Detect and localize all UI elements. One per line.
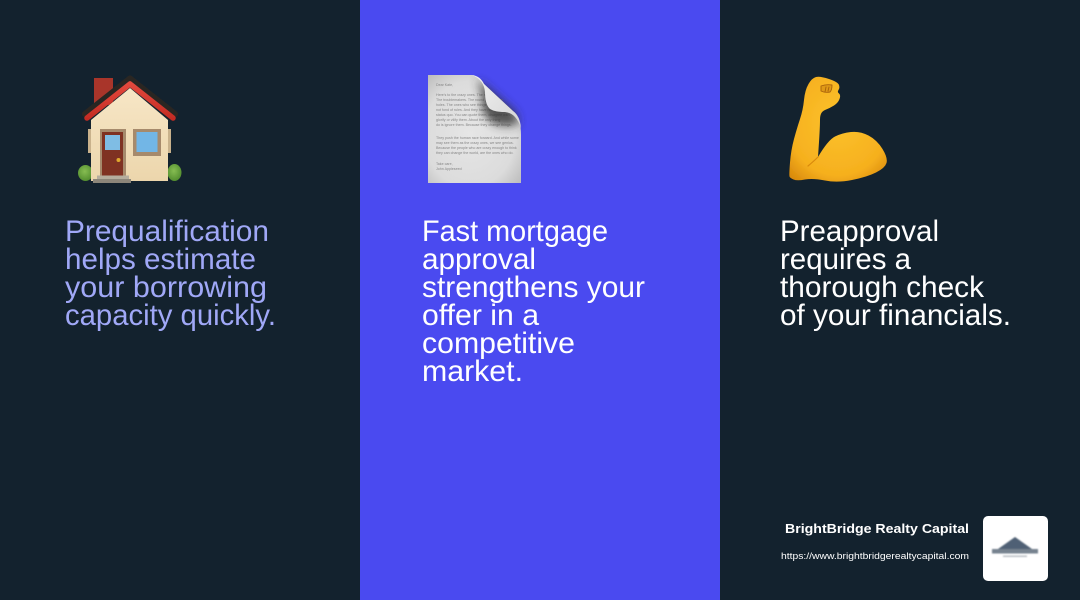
- page curl flap: [472, 75, 521, 128]
- text: prequalification: your borrowing: [65, 271, 267, 304]
- icon: house: [78, 78, 182, 183]
- icon: document: John Appleseed: [436, 167, 462, 171]
- icon: document: not fond of rules. And they have no respect: [436, 108, 504, 112]
- panel: preapproval: [720, 0, 1080, 600]
- logo: [983, 516, 1048, 581]
- text: preapproval: of your financials.: [780, 299, 1011, 332]
- text: prequalification: helps estimate: [65, 243, 256, 276]
- text: preapproval: Preapproval: [780, 215, 939, 248]
- icon: document: They push the human race forward. And while some: [436, 136, 519, 140]
- shadow under the curl: [476, 80, 519, 126]
- text: fast mortgage approval: market.: [422, 355, 523, 388]
- text: prequalification: Prequalification: [65, 215, 269, 248]
- icon: document: Dear Kate,: [436, 83, 453, 87]
- icon: document: Take care,: [436, 162, 453, 166]
- icon: document: status quo. You can quote them, disagree with: [436, 113, 510, 117]
- fist crease: [821, 85, 832, 92]
- text: preapproval: thorough check: [780, 271, 985, 304]
- panel: prequalification: [0, 0, 360, 600]
- text: prequalification: capacity quickly.: [65, 299, 276, 332]
- icon: document: they can change the world, are the ones who do.: [436, 151, 514, 155]
- text: fast mortgage approval: approval: [422, 243, 536, 276]
- icon: document: Because the people who are crazy enough to think: [436, 146, 517, 150]
- brand name: BrightBridge Realty Capital: [785, 521, 969, 536]
- elbow crease: [808, 157, 818, 166]
- icon: document: The troublemakers. The round pegs in the: [436, 98, 503, 102]
- icon: document: may see them as the crazy ones, we see genius.: [436, 141, 514, 145]
- icon: document: do is ignore them. Because they change things.: [436, 123, 512, 127]
- text: fast mortgage approval: offer in a: [422, 299, 539, 332]
- icon: document: [428, 75, 521, 183]
- icon: document: glorify or vilify them. About the only thing: [436, 118, 500, 122]
- icon: document: holes. The ones who see things differently.: [436, 103, 504, 107]
- text: preapproval: requires a: [780, 243, 911, 276]
- text: fast mortgage approval: [422, 215, 645, 388]
- footer: brand: [781, 516, 1048, 581]
- panel: fast mortgage approval: [360, 0, 720, 600]
- text: fast mortgage approval: competitive: [422, 327, 575, 360]
- text: fast mortgage approval: strengthens your: [422, 271, 645, 304]
- text: fast mortgage approval: Fast mortgage: [422, 215, 608, 248]
- icon: document: Here's to the crazy ones. The misfits.: [436, 93, 495, 97]
- brand url: https://www.brightbridgerealtycapital.com: [781, 551, 969, 562]
- icon: flexed biceps: [789, 77, 887, 182]
- text: prequalification: [65, 215, 276, 332]
- text: preapproval: [780, 215, 1011, 332]
